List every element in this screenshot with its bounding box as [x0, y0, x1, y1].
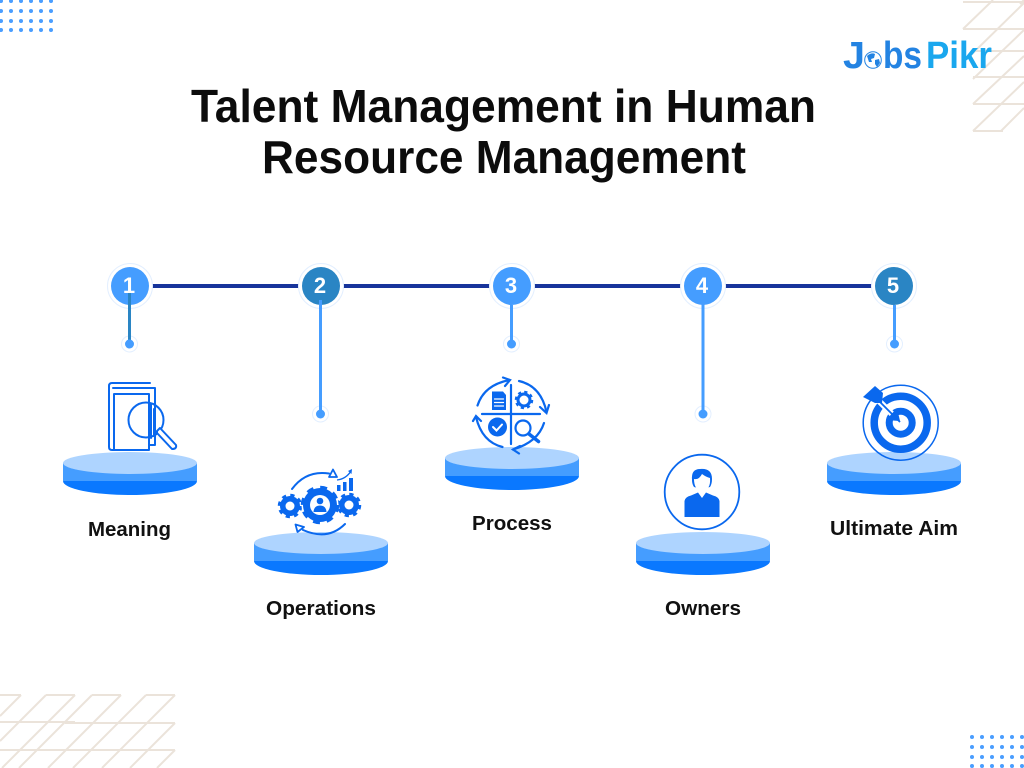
icon: gears with person — [280, 469, 360, 534]
platform — [63, 452, 197, 495]
label: Owners — [665, 598, 741, 620]
step 2: Operations — [254, 264, 388, 620]
step 1: Meaning — [63, 264, 197, 541]
title — [191, 80, 816, 183]
step number 4 — [680, 264, 726, 308]
icon: book and magnifier — [109, 383, 176, 450]
label: Meaning — [88, 519, 171, 541]
step number 5: 5 — [887, 273, 899, 298]
logo: JobsPikr: bs — [883, 35, 922, 77]
connector stem — [695, 300, 711, 422]
logo: JobsPikr: Pikr — [926, 35, 992, 77]
step 3: Process — [445, 264, 579, 535]
step number 1: 1 — [123, 273, 135, 298]
step number 2 — [298, 264, 344, 308]
connector stem — [504, 305, 520, 352]
step number 1 — [108, 264, 152, 308]
step 4: Owners — [636, 264, 770, 620]
platform — [445, 447, 579, 490]
connector stem — [122, 293, 138, 352]
label: Process — [472, 513, 552, 535]
connector stem — [886, 305, 902, 352]
icon: person in circle — [665, 455, 739, 529]
logo: JobsPikr: J — [843, 35, 865, 77]
icon: globe letter — [865, 52, 881, 68]
step number 4: 4 — [696, 273, 709, 298]
step 5: Ultimate Aim — [827, 264, 961, 540]
icon: target with dart — [863, 385, 938, 460]
label: Ultimate Aim — [830, 518, 958, 540]
platform — [827, 452, 961, 495]
step number 3 — [490, 264, 534, 308]
platform — [636, 532, 770, 575]
logo: JobsPikr — [843, 35, 992, 77]
icon: process quadrants — [473, 378, 549, 454]
title: Resource Management — [262, 131, 746, 183]
platform — [254, 532, 388, 575]
connector stem — [312, 300, 328, 422]
label: Operations — [266, 598, 376, 620]
timeline connector — [152, 284, 874, 288]
step number 5 — [872, 264, 916, 308]
title: Talent Management in Human — [191, 80, 816, 132]
step number 3: 3 — [505, 273, 517, 298]
step number 2: 2 — [314, 273, 326, 298]
